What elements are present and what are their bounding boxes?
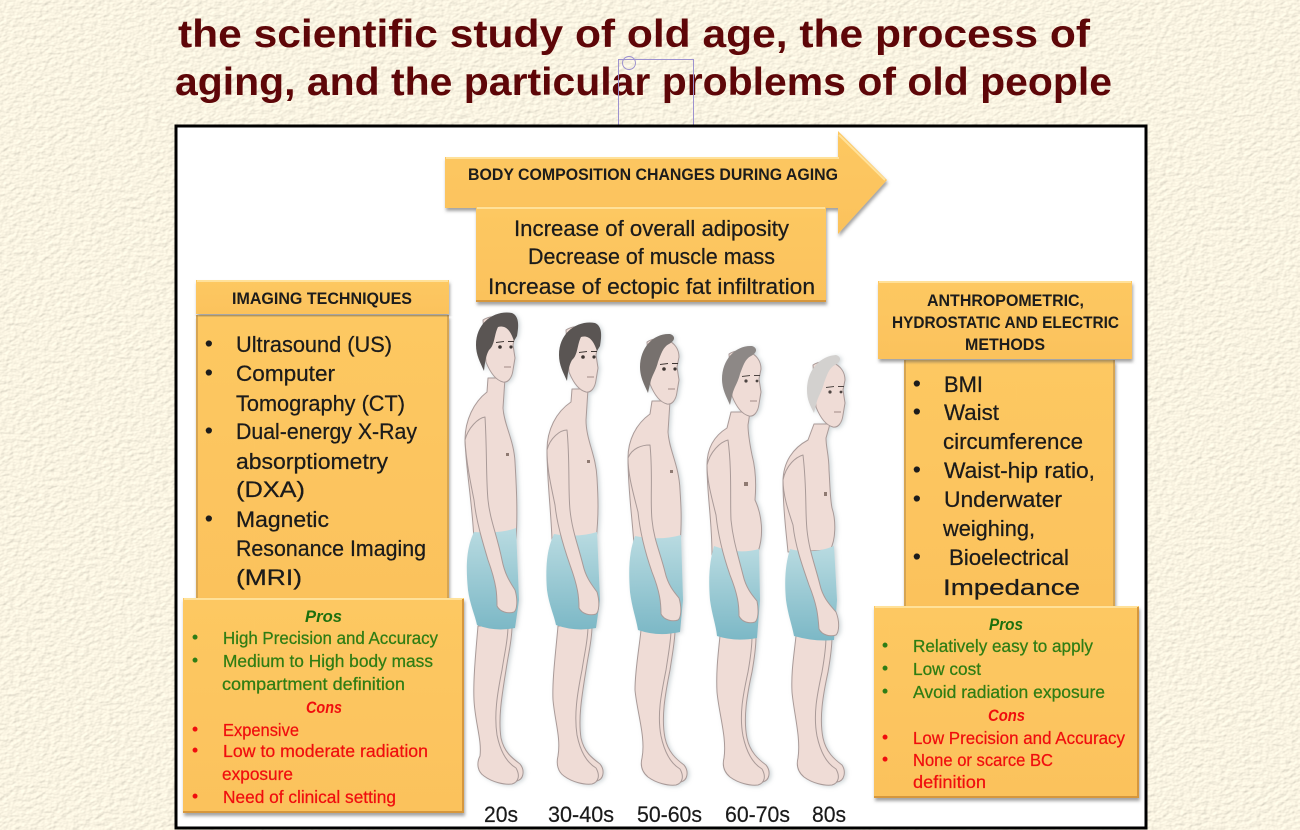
imaging list body: • — [205, 506, 213, 531]
figures: five ages — [465, 313, 845, 785]
methods pros and cons: None or scarce BC — [913, 750, 1053, 770]
head: 80s — [807, 355, 845, 427]
methods pros and cons: • — [882, 749, 888, 769]
methods pros and cons: Cons — [988, 706, 1025, 725]
panel: changes list — [476, 207, 826, 302]
panel: figure frame — [176, 126, 1146, 828]
methods list body: Underwater — [944, 487, 1062, 512]
head: 20s — [476, 313, 518, 382]
imaging pros and cons: Need of clinical setting — [223, 787, 396, 807]
imaging list body: Magnetic — [236, 507, 329, 532]
imaging list body: Tomography (CT) — [236, 391, 405, 416]
age labels: 20s — [484, 802, 518, 827]
methods pros and cons — [874, 606, 1139, 798]
methods header: METHODS — [965, 336, 1045, 354]
imaging pros and cons: High Precision and Accuracy — [223, 628, 438, 648]
methods list body: Bioelectrical — [949, 545, 1069, 570]
methods header — [878, 281, 1132, 359]
imaging pros and cons: • — [192, 719, 198, 739]
methods pros and cons: • — [882, 635, 888, 655]
imaging pros and cons: Medium to High body mass — [223, 651, 433, 671]
methods header: ANTHROPOMETRIC, — [927, 292, 1084, 310]
head: 30-40s — [559, 323, 601, 392]
imaging header: IMAGING TECHNIQUES — [232, 290, 412, 308]
methods list body — [904, 360, 1115, 608]
methods list body: • — [913, 457, 921, 482]
figure: 30-40s — [546, 323, 603, 784]
title: aging, and the particular problems of old people — [175, 61, 1112, 104]
head: 50-60s — [640, 334, 679, 404]
changes text: Increase of ectopic fat infiltration — [488, 274, 815, 299]
age labels — [484, 802, 846, 827]
imaging pros and cons — [183, 598, 464, 813]
changes text: Decrease of muscle mass — [528, 244, 775, 269]
methods list body: weighing, — [942, 516, 1035, 541]
methods list body: Impedance — [943, 575, 1080, 600]
figure: 80s — [783, 355, 845, 785]
imaging list body: Ultrasound (US) — [236, 332, 392, 357]
methods list body: circumference — [943, 429, 1083, 454]
age labels: 80s — [812, 802, 846, 827]
imaging pros and cons: exposure — [222, 764, 293, 784]
head: 60-70s — [722, 346, 761, 416]
imaging list body: (DXA) — [236, 477, 305, 502]
methods pros and cons: Low Precision and Accuracy — [913, 728, 1125, 748]
methods list body: • — [913, 399, 921, 424]
figure: 50-60s — [628, 334, 687, 785]
imaging list body: Resonance Imaging — [236, 536, 426, 561]
imaging header — [196, 280, 449, 314]
changes text — [488, 216, 815, 299]
imaging list body — [196, 315, 449, 600]
methods list body: • — [913, 371, 921, 396]
panel: imaging techniques — [183, 280, 464, 813]
imaging pros and cons: • — [192, 786, 198, 806]
methods pros and cons: Low cost — [913, 659, 981, 679]
imaging list body: • — [205, 331, 213, 356]
imaging list body: • — [205, 418, 213, 443]
methods pros and cons: Pros — [989, 615, 1023, 634]
imaging pros and cons: compartment definition — [222, 674, 405, 694]
imaging pros and cons: Cons — [306, 698, 342, 717]
changes text: Increase of overall adiposity — [514, 216, 789, 241]
arrow: body composition changes — [445, 131, 887, 234]
methods list body: Waist — [944, 400, 999, 425]
methods pros and cons: • — [882, 681, 888, 701]
imaging list body: (MRI) — [236, 565, 302, 590]
methods list body: BMI — [944, 372, 983, 397]
methods list body: • — [913, 544, 921, 569]
methods pros and cons: definition — [913, 772, 986, 792]
stray selection box — [618, 56, 694, 128]
age labels: 50-60s — [637, 802, 702, 827]
methods list body: Waist-hip ratio, — [944, 458, 1095, 483]
methods pros and cons: Avoid radiation exposure — [913, 682, 1105, 702]
imaging pros and cons: • — [192, 740, 198, 760]
imaging pros and cons: Pros — [305, 607, 342, 626]
title — [175, 13, 1112, 104]
imaging list body: Dual-energy X-Ray — [236, 419, 417, 444]
imaging pros and cons: Expensive — [223, 720, 299, 740]
panel: anthropometric methods — [874, 281, 1139, 798]
methods list body: • — [913, 486, 921, 511]
figure: 20s — [465, 313, 523, 784]
imaging pros and cons: Low to moderate radiation — [223, 741, 428, 761]
age labels: 30-40s — [548, 802, 614, 827]
figure: 60-70s — [707, 346, 769, 785]
age labels: 60-70s — [725, 802, 790, 827]
title: the scientific study of old age, the process of — [178, 13, 1091, 56]
methods pros and cons: • — [882, 727, 888, 747]
arrow heading: BODY COMPOSITION CHANGES DURING AGING — [468, 166, 838, 184]
methods header: HYDROSTATIC AND ELECTRIC — [892, 314, 1119, 332]
imaging list body: Computer — [236, 361, 335, 386]
imaging pros and cons: • — [192, 627, 198, 647]
imaging list body: • — [205, 360, 213, 385]
imaging pros and cons: • — [192, 650, 198, 670]
methods pros and cons: • — [882, 658, 888, 678]
imaging list body: absorptiometry — [236, 449, 388, 474]
methods pros and cons: Relatively easy to apply — [913, 636, 1093, 656]
